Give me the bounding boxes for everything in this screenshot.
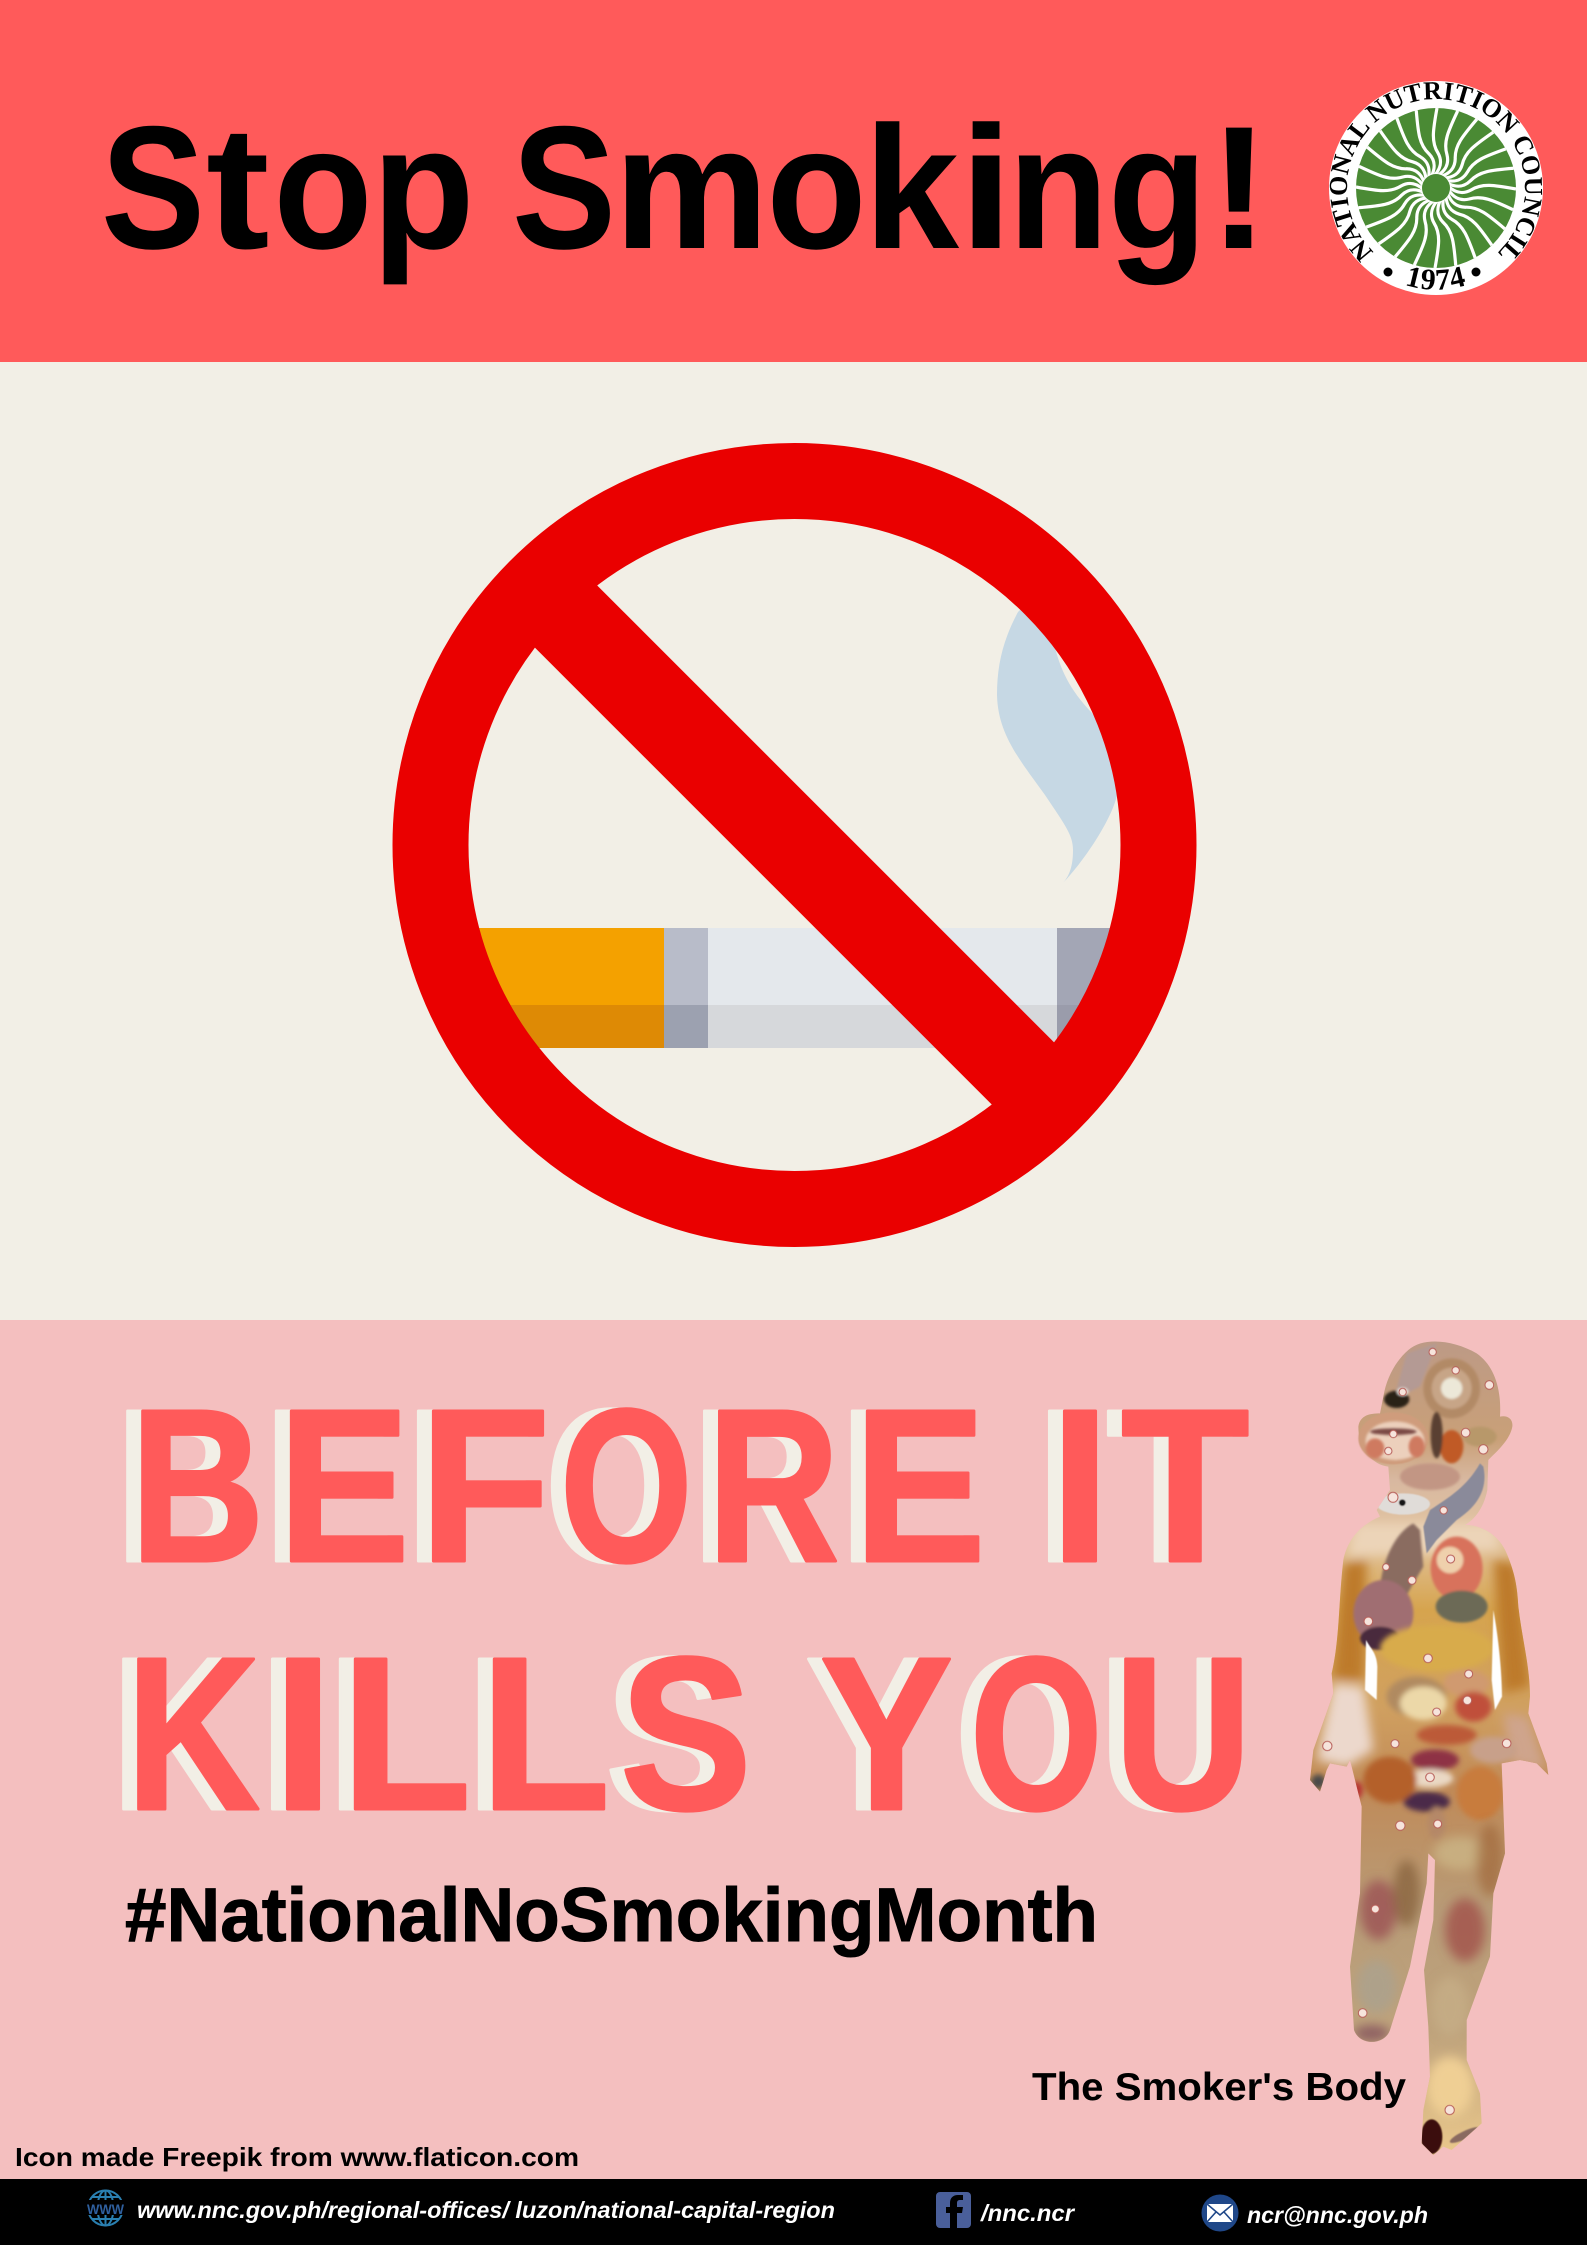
icon: facebook xyxy=(936,2192,971,2228)
footer: facebook handle: /nnc.ncr xyxy=(980,2200,1075,2226)
title: p xyxy=(372,91,475,286)
heading shadow: E xyxy=(839,1365,971,1608)
mouth xyxy=(1358,1412,1428,1464)
heading shadow: F xyxy=(404,1365,536,1608)
heading face: Y xyxy=(820,1613,953,1856)
heading shadow: U xyxy=(1099,1613,1237,1856)
title: o xyxy=(766,91,866,286)
title: ! xyxy=(1209,91,1269,286)
hashtag: #NationalNoSmokingMonth xyxy=(125,1873,1098,1958)
title: t xyxy=(206,91,270,286)
icon: smoke xyxy=(997,600,1118,883)
legs xyxy=(1353,1823,1503,2117)
trachea and collar xyxy=(1377,1463,1484,1553)
title xyxy=(101,91,1269,286)
title: S xyxy=(101,91,205,286)
head details xyxy=(1384,1343,1497,1490)
heading face: E xyxy=(278,1365,410,1608)
heading face: B xyxy=(130,1365,265,1608)
heading face: S xyxy=(620,1613,752,1856)
heading shadow: E xyxy=(263,1365,395,1608)
credit line: Icon made Freepik from www.flaticon.com xyxy=(15,2142,579,2172)
title: S xyxy=(512,91,616,286)
icon: cigarette xyxy=(479,928,1110,1048)
panel: header band xyxy=(0,0,1587,362)
title: m xyxy=(614,91,769,286)
heading face: E xyxy=(854,1365,986,1608)
heading: before it kills you xyxy=(111,1365,1252,1856)
illustration: the smoker's body xyxy=(1310,1342,1548,2155)
heading shadow xyxy=(111,1365,1237,1856)
heading face: I xyxy=(273,1613,333,1856)
white gaps beside torso xyxy=(1365,1640,1377,1700)
heading face xyxy=(126,1365,1252,1856)
heading face: U xyxy=(1114,1613,1252,1856)
footer: website: www.nnc.gov.ph/regional-offices/ luzon/national-capital-region xyxy=(137,2197,835,2223)
heading shadow: T xyxy=(1106,1365,1234,1608)
icon: globe www xyxy=(85,2190,126,2226)
icon: prohibition ring xyxy=(430,481,1158,1209)
heading shadow: B xyxy=(115,1365,250,1608)
heading shadow: L xyxy=(465,1613,595,1856)
arms xyxy=(1317,1523,1547,1770)
heading face: L xyxy=(341,1613,471,1856)
heading shadow: O xyxy=(545,1365,678,1608)
heading shadow: Y xyxy=(805,1613,938,1856)
icon: email xyxy=(1202,2194,1238,2232)
icon: globe www: WWW xyxy=(87,2201,125,2217)
panel: icon area xyxy=(0,362,1587,1320)
heading face: R xyxy=(707,1365,840,1608)
icon: prohibition slash xyxy=(499,549,1090,1141)
title: o xyxy=(274,91,372,286)
pelvis xyxy=(1311,1749,1503,1840)
caption: the smoker's body: The Smoker's Body xyxy=(1032,2066,1406,2109)
title: g xyxy=(1108,91,1207,286)
marker dots xyxy=(1323,1348,1511,2115)
title: n xyxy=(1008,91,1108,286)
toes xyxy=(1421,2119,1482,2154)
heading shadow: O xyxy=(955,1613,1088,1856)
heading face: T xyxy=(1121,1365,1249,1608)
heading shadow: K xyxy=(111,1613,245,1856)
panel: message area xyxy=(0,1320,1587,2179)
heading face: O xyxy=(970,1613,1103,1856)
icon: National Nutrition Council logo: 1974 xyxy=(1406,266,1466,290)
title: k xyxy=(864,91,960,286)
footer: email: ncr@nnc.gov.ph xyxy=(1247,2202,1428,2228)
heading shadow: R xyxy=(692,1365,825,1608)
heading shadow: L xyxy=(326,1613,456,1856)
heading face: L xyxy=(480,1613,610,1856)
heading face: F xyxy=(419,1365,550,1608)
heading face: I xyxy=(1050,1365,1110,1608)
icon: no smoking sign xyxy=(430,481,1158,1209)
heading face: O xyxy=(560,1365,693,1608)
heading face: K xyxy=(126,1613,260,1856)
abdomen xyxy=(1380,1625,1517,1763)
heading shadow: S xyxy=(605,1613,737,1856)
icon: National Nutrition Council logo: NATIONAL NUTRITION COUNCIL xyxy=(1330,82,1542,263)
heading shadow: I xyxy=(1035,1365,1095,1608)
lungs and heart xyxy=(1353,1523,1488,1650)
panel: footer bar xyxy=(0,2179,1587,2245)
heading shadow: I xyxy=(258,1613,318,1856)
title: i xyxy=(959,91,1013,286)
